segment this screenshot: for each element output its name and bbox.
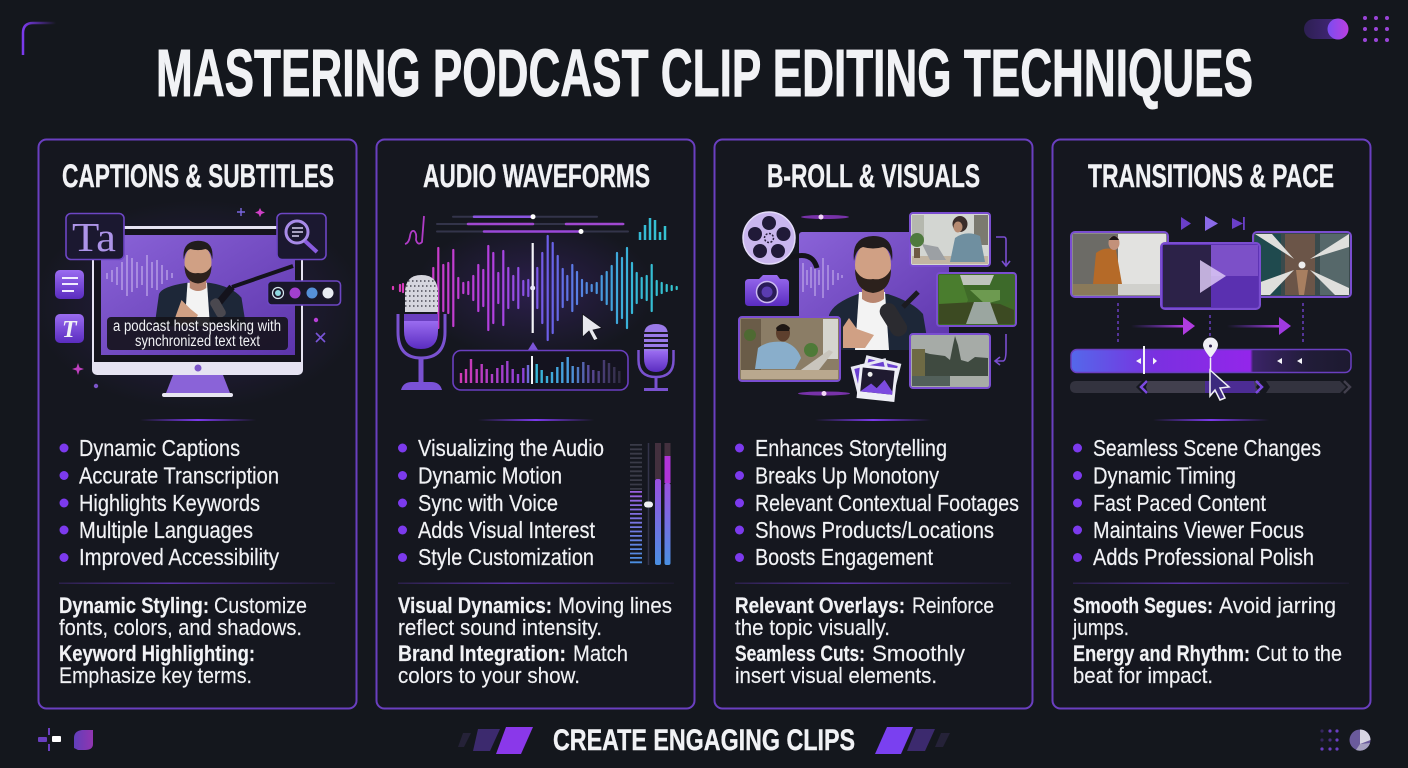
illustration: monitor with podcast host: [33, 200, 363, 410]
bullet list: [398, 435, 604, 570]
tips text: Avoid jarring: [1219, 593, 1336, 618]
tips text: Match: [573, 641, 628, 666]
motion arrows: [1131, 317, 1291, 335]
small equaliser bars: [640, 218, 665, 240]
tips text: Cut to the: [1256, 641, 1342, 666]
icon: italic T button: T: [62, 317, 78, 343]
tips text: Relevant Overlays:: [735, 593, 905, 618]
photo: woman at laptop: [910, 213, 990, 266]
corner accent top left: [23, 23, 56, 55]
playhead pin: [1203, 338, 1218, 370]
flow arrows: [995, 237, 1010, 365]
tips text: Emphasize key terms.: [59, 663, 252, 688]
screen caption text: synchronized text text: [135, 333, 261, 350]
panel: b-roll and visuals: [714, 140, 1032, 708]
heading: captions and subtitles: CAPTIONS & SUBTITLES: [62, 158, 334, 194]
bullet list: Improved Accessibility: [79, 544, 279, 570]
playhead: [532, 243, 534, 333]
tips text: Reinforce: [912, 593, 994, 618]
icon: colour swatches: [268, 281, 340, 305]
bullet list: Sync with Voice: [418, 490, 558, 516]
tips text: Visual Dynamics:: [398, 593, 552, 618]
tips text: Smooth Segues:: [1073, 593, 1213, 618]
icon: film reel: [743, 212, 795, 264]
sparkle glows: [798, 214, 850, 396]
illustration: transitions timeline: [1070, 216, 1351, 400]
mini waveform box: [453, 342, 628, 390]
footer call to action: CREATE ENGAGING CLIPS: [553, 724, 855, 757]
divider: [1153, 419, 1269, 421]
tips text: Energy and Rhythm:: [1073, 641, 1250, 666]
bullet list: Breaks Up Monotony: [755, 462, 939, 488]
tips text: Brand Integration:: [398, 641, 566, 666]
photo: man at laptop: [739, 317, 840, 381]
frame: center play: [1161, 243, 1260, 309]
illustration: b-roll collage: [739, 212, 1016, 402]
panel: transitions and pace: [1052, 140, 1370, 708]
bullet list: Relevant Contextual Footages: [755, 490, 1019, 516]
frame: motion blur wedges: [1253, 232, 1351, 297]
tips text: beat for impact.: [1073, 663, 1213, 688]
bullet list: Accurate Transcription: [79, 462, 279, 488]
slider lines: [437, 217, 628, 232]
divider: [140, 419, 256, 421]
screen caption text: [113, 318, 281, 350]
bullet list: Fast Paced Content: [1093, 490, 1267, 516]
bullet list: Dynamic Motion: [418, 462, 562, 488]
bullet list: [60, 435, 279, 570]
footer icons left: [38, 728, 93, 751]
level meter: [636, 443, 670, 565]
panel: audio waveforms: [376, 140, 694, 708]
divider: [815, 419, 931, 421]
frame: presenter dissolving: [1071, 232, 1168, 297]
tips text: Dynamic Styling:: [59, 593, 209, 618]
tips text: the topic visually.: [735, 615, 890, 640]
tips text: [59, 593, 307, 688]
sparkles: [72, 208, 325, 388]
bullet list: Style Customization: [418, 544, 594, 570]
tips text: insert visual elements.: [735, 663, 937, 688]
photo: city by water: [910, 334, 990, 388]
toggle and dot grid decoration: [1304, 16, 1389, 42]
tips text: Customize: [214, 593, 307, 618]
bullet list: [1073, 435, 1321, 570]
bullet list: Dynamic Captions: [79, 435, 240, 461]
icon: typography box: Ta: [72, 214, 116, 260]
bullet list: Multiple Languages: [79, 517, 253, 543]
footer right slashes: [875, 727, 950, 754]
tips text: reflect sound intensity.: [398, 615, 602, 640]
bullet list: Shows Products/Locations: [755, 517, 994, 543]
icon: italic T button: [55, 314, 84, 343]
presenter: [826, 236, 929, 350]
tips text: Moving lines: [558, 593, 672, 618]
arc connector: [790, 256, 817, 268]
icon: search box: [277, 214, 326, 260]
cursor: [1210, 370, 1229, 400]
tips text: jumps.: [1072, 615, 1129, 640]
bullet list: Dynamic Timing: [1093, 462, 1236, 488]
bullet list: Boosts Engagement: [755, 544, 934, 570]
dashed guides: [1118, 303, 1303, 342]
tips text: fonts, colors, and shadows.: [59, 615, 302, 640]
heading: b-roll and visuals: B-ROLL & VISUALS: [767, 158, 980, 194]
divider: [478, 419, 594, 421]
tips text: [398, 593, 672, 688]
heading: audio waveforms: AUDIO WAVEFORMS: [423, 158, 650, 194]
squiggle icon: [405, 216, 424, 244]
screen caption text: a podcast host spesking with: [113, 318, 281, 335]
footer icons right: [1320, 729, 1370, 751]
panel: captions and subtitles: [33, 140, 363, 708]
icon: large microphone: [398, 275, 445, 390]
bullet list: [735, 435, 1019, 570]
cursor: [582, 314, 602, 340]
footer left slashes: [458, 727, 533, 754]
tips text: [1072, 593, 1342, 688]
bullet list: Maintains Viewer Focus: [1093, 517, 1304, 543]
tips text: Smoothly: [872, 641, 966, 666]
tips text: Keyword Highlighting:: [59, 641, 255, 666]
tips text: colors to your show.: [398, 663, 580, 688]
chevron strip: [1070, 381, 1350, 393]
playback icons: [1181, 216, 1245, 231]
illustration: waveform: [393, 214, 677, 390]
icon: text lines button: [55, 270, 84, 299]
icon: typography box: [66, 214, 124, 260]
bullet list: Adds Professional Polish: [1093, 544, 1314, 570]
tips text: Seamless Cuts:: [735, 641, 865, 666]
tips text: [735, 593, 994, 688]
bullet list: Seamless Scene Changes: [1093, 435, 1321, 461]
icon: small microphone: [638, 324, 674, 390]
bullet list: Adds Visual Interest: [418, 517, 596, 543]
bullet list: Visualizing the Audio: [418, 435, 604, 461]
bullet list: Enhances Storytelling: [755, 435, 947, 461]
photo: forest river: [937, 273, 1016, 326]
timeline bar: [1071, 346, 1351, 374]
icon: camera: [745, 275, 789, 306]
icon: photo stack: [851, 355, 901, 402]
bullet list: Highlights Keywords: [79, 490, 260, 516]
waveform bars: [393, 236, 677, 340]
